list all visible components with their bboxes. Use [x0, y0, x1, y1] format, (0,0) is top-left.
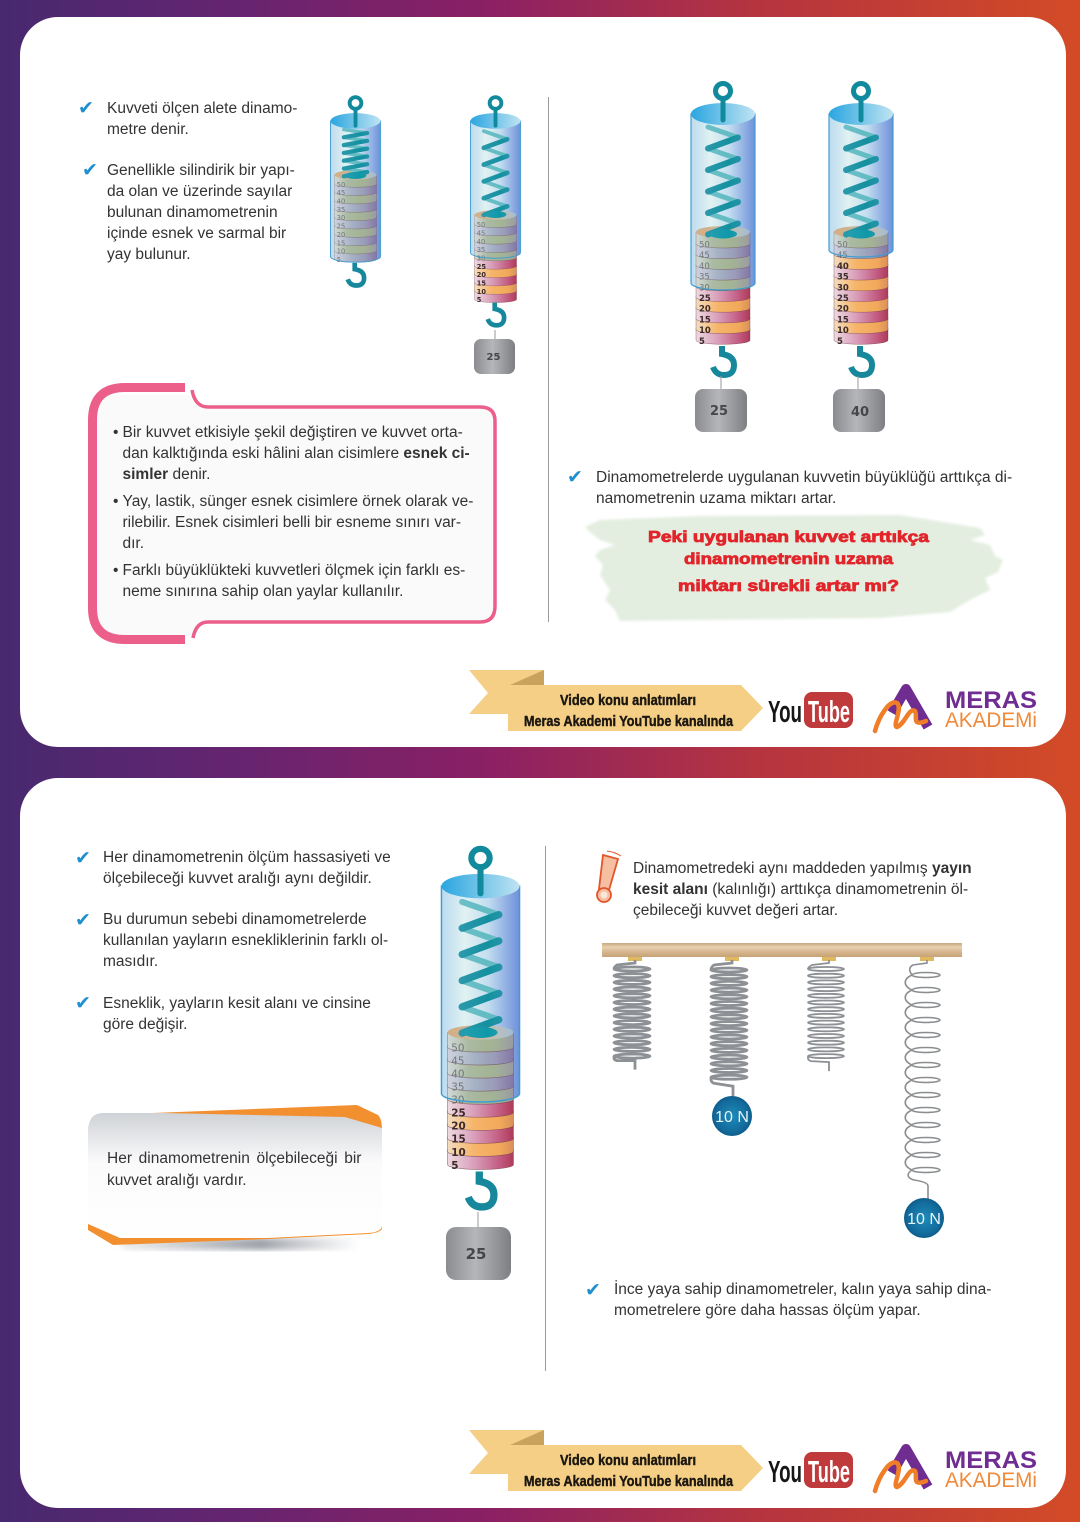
banner: video notice top	[469, 670, 763, 731]
text block: force vs extension: Dinamometrelerde uygulanan kuvvetin büyüklüğü arttıkça di-	[596, 469, 1012, 486]
text block: measuring range: ölçebileceği kuvvet aralığı aynı değildir.	[103, 870, 372, 887]
dynamometer: tall with 25 N: 5	[451, 1160, 458, 1172]
callout: question on brush	[585, 515, 1003, 621]
dynamometer: 40 N large: 15	[837, 315, 849, 325]
text block: dynamometer definition: ✔	[82, 159, 98, 181]
text block: force vs extension: namometrenin uzama miktarı artar.	[596, 490, 836, 507]
dynamometer: tall with 25 N	[441, 849, 520, 1207]
dynamometer: 25 N large: 10	[699, 326, 711, 336]
weight: 40	[833, 376, 885, 432]
weight ball 2: 10 N	[907, 1211, 941, 1228]
spring 3 thin	[808, 960, 844, 1071]
panel: top page	[20, 17, 1066, 747]
dynamometer: tall with 25 N: 35	[451, 1082, 464, 1094]
dynamometer: 40 N large: 25	[837, 294, 849, 304]
text block: cross section	[633, 860, 972, 919]
dynamometer: tall with 25 N: 10	[451, 1147, 466, 1159]
banner: video notice bottom	[469, 1430, 763, 1491]
divider	[548, 97, 549, 622]
dynamometer: 25 N large: 50	[699, 240, 710, 250]
text block: cross section: çebileceği kuvvet değeri artar.	[633, 902, 838, 919]
dynamometer: unloaded: 25	[337, 223, 345, 231]
text block: measuring range: kullanılan yayların esnekliklerinin farklı ol-	[103, 932, 388, 949]
text block: thin vs thick spring: İnce yaya sahip dinamometreler, kalın yaya sahip dina-	[614, 1280, 991, 1298]
text block: dynamometer definition	[78, 97, 297, 263]
callout: measuring range note	[88, 1105, 382, 1250]
dynamometer: unloaded: 10	[337, 248, 345, 256]
icon: warning exclamation	[597, 851, 621, 902]
callout: question on brush: miktarı sürekli artar mı?	[678, 578, 899, 595]
logo: YouTube bottom: You	[768, 1454, 802, 1489]
dynamometer: 25 N load: 40	[477, 238, 485, 246]
callout: elastic bodies: Farklı büyüklükteki kuvvetleri ölçmek için farklı es-	[122, 562, 465, 579]
text block: dynamometer definition: yay bulunur.	[107, 246, 191, 263]
dynamometer: 25 N load	[471, 97, 520, 325]
callout: elastic bodies: rilebilir. Esnek cisimleri belli bir esneme sınırı var-	[122, 514, 461, 531]
dynamometer: 40 N large	[829, 84, 893, 375]
text block: measuring range: Her dinamometrenin ölçüm hassasiyeti ve	[103, 849, 391, 866]
dynamometer: unloaded: 20	[337, 231, 345, 239]
dynamometer: tall with 25 N: 50	[451, 1042, 464, 1054]
dynamometer: 25 N large: 45	[699, 251, 710, 261]
weight: 25 small	[474, 330, 515, 374]
weight: 25 small: 25	[487, 352, 500, 363]
logo: Meras Akademi top: MERAS	[945, 687, 1037, 714]
text block: measuring range	[75, 847, 391, 1033]
dynamometer: 25 N large: 5	[699, 337, 705, 347]
dynamometer: 25 N load: 20	[477, 271, 486, 279]
callout: measuring range note: kuvvet aralığı vardır.	[107, 1172, 247, 1189]
text block: measuring range: masıdır.	[103, 953, 158, 970]
dynamometer: 25 N load: 30	[477, 254, 485, 262]
text block: dynamometer definition: Kuvveti ölçen alete dinamo-	[107, 100, 297, 117]
dynamometer: 25 N large: 40	[699, 262, 710, 272]
dynamometer: unloaded: 15	[337, 239, 345, 247]
weight: 25 large	[695, 376, 747, 432]
callout: elastic bodies: dan kalktığında eski hâlini alan cisimlere esnek ci-	[122, 445, 470, 462]
logo: YouTube bottom: Tube	[808, 1454, 850, 1489]
callout: elastic bodies	[92, 388, 495, 640]
logo: Meras Akademi bottom: MERAS	[945, 1447, 1037, 1474]
callout: elastic bodies: Yay, lastik, sünger esnek cisimlere örnek olarak ve-	[122, 493, 473, 510]
logo: Meras Akademi top: AKADEMi	[945, 709, 1037, 732]
dynamometer: 40 N large: 20	[837, 305, 849, 315]
dynamometer: tall with 25 N: 30	[451, 1095, 464, 1107]
text block: dynamometer definition: Genellikle silindirik bir yapı-	[107, 162, 295, 179]
dynamometer: 25 N large	[691, 84, 755, 375]
text block: thin vs thick spring: mometrelere göre daha hassas ölçüm yapar.	[614, 1302, 921, 1319]
logo: YouTube bottom	[768, 1452, 853, 1489]
text block: force vs extension: ✔	[567, 466, 583, 488]
weight ball 1	[712, 1096, 752, 1136]
figure: springs with weights	[602, 943, 962, 1238]
text block: measuring range: ✔	[75, 992, 91, 1014]
dynamometer: 40 N large: 35	[837, 273, 849, 283]
text block: dynamometer definition: bulunan dinamometrenin	[107, 204, 278, 221]
text block: dynamometer definition: içinde esnek ve sarmal bir	[107, 225, 286, 242]
text block: cross section: Dinamometredeki aynı maddeden yapılmış yayın	[633, 860, 972, 877]
banner: video notice bottom: Video konu anlatımları	[560, 1452, 696, 1469]
dynamometer: 25 N load: 45	[477, 229, 485, 237]
divider	[545, 846, 546, 1371]
dynamometer: 25 N load: 50	[477, 221, 485, 229]
weight: 25 tall: 25	[466, 1245, 486, 1263]
dynamometer: 40 N large: 45	[837, 251, 848, 261]
callout: question on brush: Peki uygulanan kuvvet arttıkça	[648, 529, 929, 546]
weight: 25 tall	[446, 1212, 511, 1280]
logo: Meras Akademi top	[875, 687, 1037, 732]
text block: measuring range: ✔	[75, 847, 91, 869]
text block: thin vs thick spring: ✔	[585, 1279, 601, 1301]
dynamometer: unloaded: 30	[337, 214, 345, 222]
weight: 40: 40	[851, 405, 869, 420]
dynamometer: 25 N load: 35	[477, 246, 485, 254]
logo: YouTube top	[768, 692, 853, 729]
dynamometer: 25 N large: 25	[699, 294, 711, 304]
spring 2 thick with weight	[711, 960, 747, 1096]
dynamometer: 40 N large: 5	[837, 337, 843, 347]
dynamometer: 25 N large: 15	[699, 315, 711, 325]
callout: elastic bodies: •	[113, 562, 118, 579]
dynamometer: 40 N large: 40	[837, 262, 849, 272]
dynamometer: tall with 25 N: 40	[451, 1068, 464, 1080]
text block: thin vs thick spring	[585, 1279, 991, 1319]
dynamometer: 40 N large: 50	[837, 240, 848, 250]
dynamometer: tall with 25 N: 20	[451, 1121, 466, 1133]
logo: YouTube top: Tube	[808, 694, 850, 729]
dynamometer: 25 N large: 30	[699, 283, 710, 293]
text block: dynamometer definition: da olan ve üzerinde sayılar	[107, 183, 292, 200]
weight ball 1: 10 N	[715, 1109, 749, 1126]
dynamometer: 25 N load: 10	[477, 288, 486, 296]
dynamometer: unloaded: 35	[337, 206, 345, 214]
weight ball 2	[904, 1198, 944, 1238]
dynamometer: 25 N load: 25	[477, 263, 486, 271]
logo: Meras Akademi bottom: AKADEMi	[945, 1469, 1037, 1492]
banner: video notice top: Video konu anlatımları	[560, 692, 696, 709]
dynamometer: unloaded: 5	[337, 256, 341, 264]
dynamometer: unloaded	[331, 97, 380, 286]
spring 1 thick	[614, 960, 650, 1070]
spring 4 stretched	[905, 960, 940, 1200]
dynamometer: unloaded: 45	[337, 189, 345, 197]
banner: video notice top: Meras Akademi YouTube kanalında	[524, 713, 734, 730]
text block: cross section: kesit alanı (kalınlığı) arttıkça dinamometrenin öl-	[633, 881, 968, 898]
callout: elastic bodies: neme sınırına sahip olan yaylar kullanılır.	[122, 583, 403, 600]
callout: elastic bodies: dır.	[122, 535, 144, 552]
callout: elastic bodies: Bir kuvvet etkisiyle şekil değiştiren ve kuvvet orta-	[122, 424, 463, 441]
text block: dynamometer definition: ✔	[78, 97, 94, 119]
text block: measuring range: Bu durumun sebebi dinamometrelerde	[103, 911, 367, 928]
dynamometer: 40 N large: 30	[837, 283, 849, 293]
callout: measuring range note: Her dinamometrenin ölçebileceği bir	[107, 1150, 361, 1167]
dynamometer: tall with 25 N: 45	[451, 1055, 464, 1067]
dynamometer: unloaded: 40	[337, 198, 345, 206]
callout: question on brush: dinamometrenin uzama	[684, 551, 893, 568]
weight: 25 large: 25	[710, 404, 728, 419]
dynamometer: 25 N load: 5	[477, 296, 482, 304]
dynamometer: 40 N large: 10	[837, 326, 849, 336]
callout: elastic bodies: •	[113, 424, 118, 441]
logo: Meras Akademi bottom	[875, 1447, 1037, 1492]
text block: measuring range: göre değişir.	[103, 1016, 187, 1033]
dynamometer: 25 N large: 35	[699, 273, 710, 283]
text block: measuring range: ✔	[75, 909, 91, 931]
dynamometer: unloaded: 50	[337, 181, 345, 189]
text block: measuring range: Esneklik, yayların kesit alanı ve cinsine	[103, 995, 371, 1012]
logo: YouTube top: You	[768, 694, 802, 729]
banner: video notice bottom: Meras Akademi YouTube kanalında	[524, 1473, 734, 1490]
callout: elastic bodies: •	[113, 493, 118, 510]
callout: elastic bodies: simler denir.	[122, 466, 210, 483]
dynamometer: tall with 25 N: 15	[451, 1134, 466, 1146]
dynamometer: 25 N large: 20	[699, 305, 711, 315]
text block: dynamometer definition: metre denir.	[107, 121, 189, 138]
dynamometer: 25 N load: 15	[477, 280, 486, 288]
panel: bottom page	[20, 778, 1066, 1508]
dynamometer: tall with 25 N: 25	[451, 1108, 466, 1120]
text block: force vs extension	[567, 466, 1012, 507]
